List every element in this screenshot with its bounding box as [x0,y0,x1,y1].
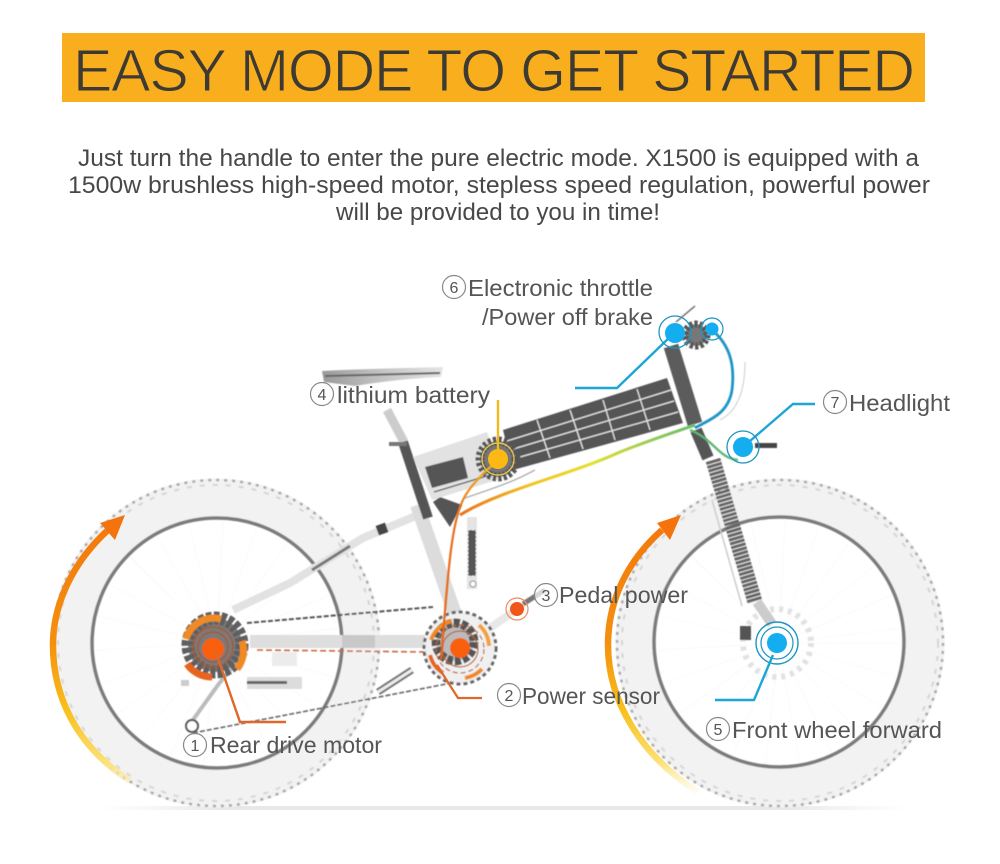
callout: power sensor [437,665,660,709]
callout: lithium battery: 4 [318,387,327,404]
bicycle illustration [53,306,943,806]
front wheel motion arrow [608,515,698,792]
handlebar controls [676,306,777,448]
intro paragraph: Just turn the handle to enter the pure electric mode. X1500 is equipped with a [78,145,920,172]
rear wheel motion arrow [53,515,130,781]
callout: rear drive motor: Rear drive motor [210,732,382,758]
title banner: EASY MODE TO GET STARTED [73,38,915,104]
callout: lithium battery: lithium battery [337,382,491,408]
rear wheel [53,480,379,806]
callout: electronic throttle and power off brake: /Power off brake [482,304,653,330]
chain [193,607,467,733]
main frame section [413,432,503,500]
derailleur and parts [181,652,412,732]
callout: power sensor: Power sensor [522,683,660,709]
callout: rear drive motor: 1 [191,738,200,755]
intro paragraph [68,145,930,226]
callout: pedal power [506,582,688,620]
head tube and fork [671,346,772,640]
rear frame and chainstay [233,497,464,648]
callout: headlight [727,390,951,463]
callout: lithium battery [310,382,514,475]
front wheel [617,480,943,806]
intro paragraph: will be provided to you in time! [335,199,660,226]
rear shock [467,517,477,589]
bottom bracket and chainring [424,612,496,684]
callout: pedal power: Pedal power [559,582,688,608]
callout: electronic throttle and power off brake: Electronic throttle [468,275,653,301]
callout: front wheel forward [706,622,942,743]
rear hub [186,618,243,677]
wiring loom [441,330,738,660]
intro paragraph: 1500w brushless high-speed motor, stepless speed regulation, powerful power [68,172,930,199]
callout: electronic throttle and power off brake [442,275,723,388]
callout: headlight: 7 [831,395,840,412]
callout: rear drive motor [184,650,382,758]
callout: headlight: Headlight [849,390,951,416]
callout: front wheel forward: Front wheel forward [732,717,942,743]
callout: pedal power: 3 [542,588,551,605]
battery pack [480,378,683,477]
callout: power sensor: 2 [505,688,514,705]
saddle and seat post [322,367,443,518]
callout: front wheel forward: 5 [714,722,723,739]
callout: electronic throttle and power off brake: 6 [450,280,459,297]
ground shadow [100,806,910,810]
crank arm and pedal [470,590,545,642]
